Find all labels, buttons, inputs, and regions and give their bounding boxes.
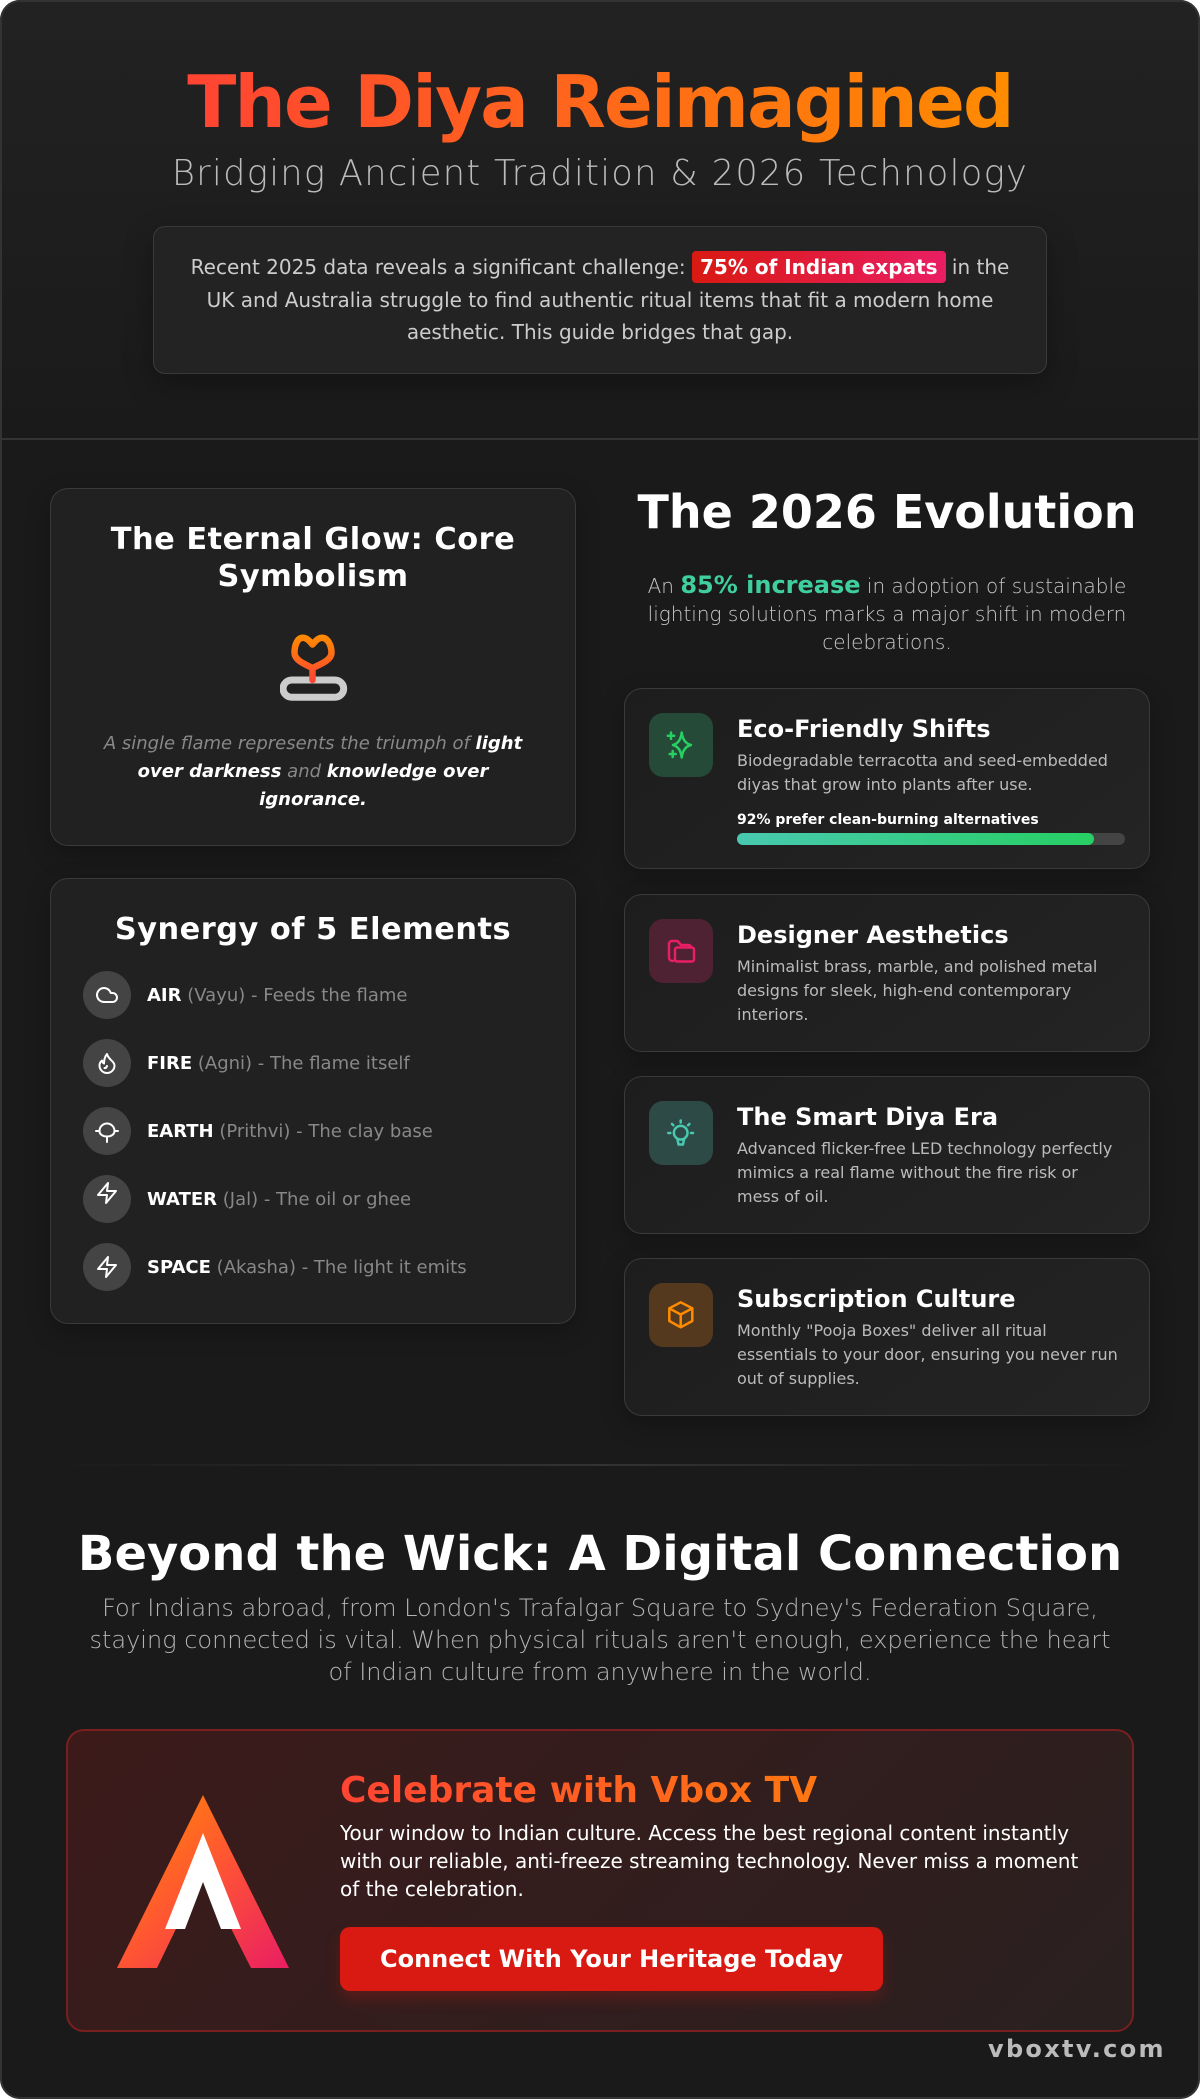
description: interiors. <box>737 1005 809 1024</box>
description: Biodegradable terracotta and seed-embedded <box>737 751 1108 770</box>
heading: beyond the wick: Beyond the Wick: A Digital Connection <box>78 1526 1122 1582</box>
logo: vbox mark <box>117 1795 289 1968</box>
description: diyas that grow into plants after use. <box>737 775 1033 794</box>
heading: 2026 evolution: The 2026 Evolution <box>637 485 1136 539</box>
heading: eternal glow: Symbolism <box>217 558 409 594</box>
description: designs for sleek, high-end contemporary <box>737 981 1071 1000</box>
title: Eco-Friendly Shifts <box>737 715 991 743</box>
header band <box>0 0 1200 440</box>
intro callout <box>153 226 1047 374</box>
icon: bulb <box>649 1101 713 1165</box>
element: earth: EARTH (Prithvi) - The clay base <box>147 1121 433 1142</box>
element: fire: FIRE (Agni) - The flame itself <box>147 1053 410 1074</box>
element: air: AIR (Vayu) - Feeds the flame <box>147 985 408 1006</box>
cta text <box>340 1821 1078 1901</box>
symbolism text: over darkness and knowledge over <box>138 761 488 782</box>
title: Designer Aesthetics <box>737 921 1009 949</box>
heading: eternal glow: The Eternal Glow: Core <box>111 522 515 556</box>
description: mimics a real flame without the fire risk or <box>737 1163 1078 1182</box>
cta button: Connect With Your Heritage Today <box>380 1945 843 1973</box>
heading: synergy: Synergy of 5 Elements <box>115 912 511 946</box>
icon: box <box>649 1283 713 1347</box>
element: water <box>83 1175 411 1223</box>
evolution intro text: An 85% increase in adoption of sustainable <box>648 571 1126 599</box>
subtitle: Bridging Ancient Tradition & 2026 Technology <box>172 153 1028 194</box>
element: space <box>83 1243 467 1291</box>
description <box>737 957 1097 1024</box>
element: space: SPACE (Akasha) - The light it emits <box>147 1257 467 1278</box>
symbolism text: A single flame represents the triumph of light <box>104 733 522 754</box>
icon: sparkles <box>649 713 713 777</box>
card: smart diya <box>624 1076 1150 1234</box>
intro callout: aesthetic. This guide bridges that gap. <box>407 320 793 344</box>
card: eco-friendly <box>624 688 1150 869</box>
panel: core symbolism <box>50 488 576 846</box>
title: The Diya Reimagined <box>187 60 1013 144</box>
symbolism text: ignorance. <box>259 789 367 810</box>
panel: five elements <box>50 878 576 1324</box>
description: Minimalist brass, marble, and polished metal <box>737 957 1097 976</box>
digital connection text: For Indians abroad, from London's Trafalgar Square to Sydney's Federation Square, <box>102 1594 1098 1622</box>
progress bar <box>737 833 1125 845</box>
cta text: Your window to Indian culture. Access the best regional content instantly <box>340 1821 1069 1845</box>
evolution intro text: lighting solutions marks a major shift in modern <box>648 602 1126 626</box>
title: Subscription Culture <box>737 1285 1016 1313</box>
description: out of supplies. <box>737 1369 860 1388</box>
card: subscription <box>624 1258 1150 1416</box>
intro callout: Recent 2025 data reveals a significant challenge: 75% of Indian expats in the <box>191 255 1009 279</box>
icon: diya flame <box>280 634 348 701</box>
evolution intro text: celebrations. <box>822 630 952 654</box>
element: air <box>83 971 408 1019</box>
description: Monthly "Pooja Boxes" deliver all ritual <box>737 1321 1047 1340</box>
description <box>737 1139 1112 1206</box>
panel: vbox cta <box>66 1729 1134 2032</box>
description: Advanced flicker-free LED technology perfectly <box>737 1139 1112 1158</box>
symbolism text <box>103 733 523 810</box>
evolution intro text <box>648 571 1126 654</box>
watermark: vboxtv.com <box>988 2035 1166 2063</box>
cta button <box>340 1927 883 1991</box>
bar label: 92% prefer clean-burning alternatives <box>737 812 1039 828</box>
element: fire <box>83 1039 410 1087</box>
icon: folder <box>649 919 713 983</box>
description: mess of oil. <box>737 1187 828 1206</box>
description <box>737 751 1108 794</box>
element: water: WATER (Jal) - The oil or ghee <box>147 1189 411 1210</box>
title: The Smart Diya Era <box>737 1103 998 1131</box>
description <box>737 1321 1118 1388</box>
description: essentials to your door, ensuring you never run <box>737 1345 1118 1364</box>
cta title: Celebrate with Vbox TV <box>340 1770 817 1811</box>
cta text: with our reliable, anti-freeze streaming technology. Never miss a moment <box>340 1849 1078 1873</box>
intro callout: UK and Australia struggle to find authentic ritual items that fit a modern home <box>207 288 993 312</box>
element: earth <box>83 1107 433 1155</box>
digital connection text: of Indian culture from anywhere in the world. <box>328 1658 872 1686</box>
digital connection text <box>89 1594 1110 1686</box>
heading: eternal glow <box>110 522 515 594</box>
cta text: of the celebration. <box>340 1877 524 1901</box>
card: designer <box>624 894 1150 1052</box>
digital connection text: staying connected is vital. When physical rituals aren't enough, experience the heart <box>89 1626 1110 1654</box>
